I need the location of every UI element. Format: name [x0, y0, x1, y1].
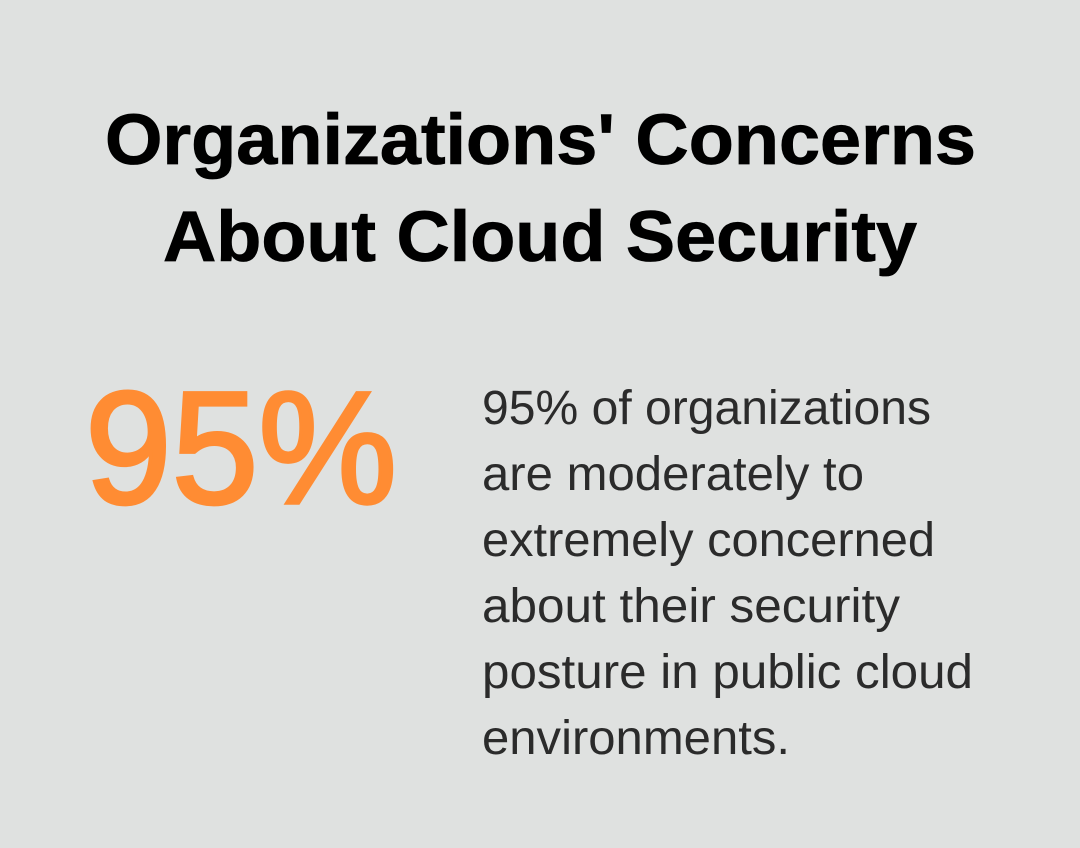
- title: Organizations' Concerns: [105, 101, 976, 180]
- description text: extremely concerned: [482, 514, 935, 567]
- description text: 95% of organizations: [482, 382, 931, 435]
- title: [105, 101, 976, 277]
- description text: are moderately to: [482, 448, 864, 501]
- description text: environments.: [482, 712, 790, 765]
- description text: [482, 382, 973, 765]
- title: About Cloud Security: [163, 198, 918, 277]
- big statistic: 95%: 95%: [85, 358, 397, 537]
- description text: about their security: [482, 580, 900, 633]
- description text: posture in public cloud: [482, 646, 973, 699]
